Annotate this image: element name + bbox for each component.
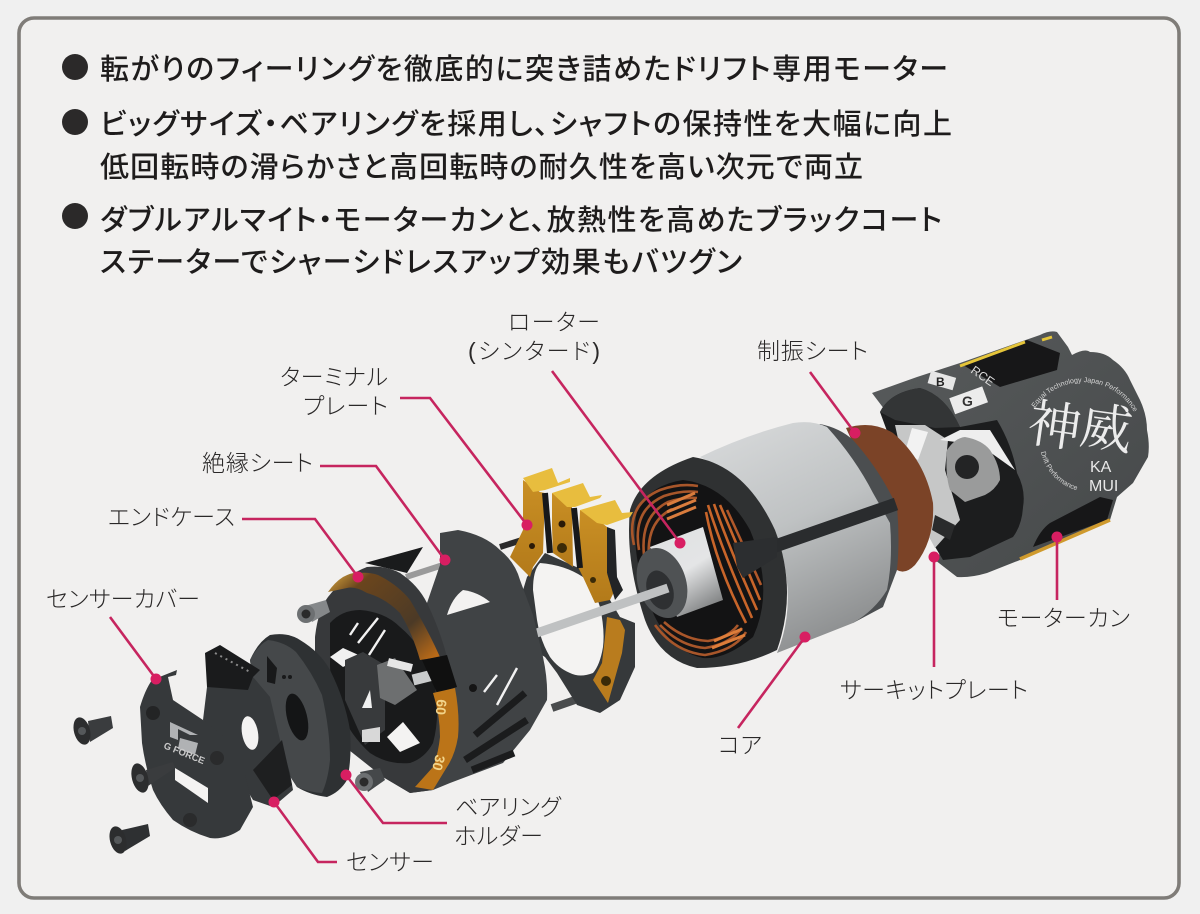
gold ring band upper xyxy=(328,573,440,660)
label: insulation sheet xyxy=(202,450,450,566)
plate gold bodies xyxy=(510,480,545,577)
label: sensor cover xyxy=(46,586,200,684)
case screw upper xyxy=(297,600,330,623)
G-FORCE logo xyxy=(162,722,206,767)
gold ring band lower xyxy=(415,688,459,790)
feature text 1: 転がりのフィーリングを徹底的に突き詰めたドリフト専用モーター xyxy=(100,53,948,86)
can hub and circuit plate xyxy=(895,425,1015,548)
ring scale number 30: 30 xyxy=(429,753,449,773)
copper windings xyxy=(632,485,761,655)
stator core xyxy=(628,422,898,668)
end case xyxy=(297,530,547,793)
ring scale number 60: 60 xyxy=(433,699,450,716)
label: rotor: (シンタード) xyxy=(468,338,600,364)
label: end case xyxy=(108,504,364,582)
plate tabs xyxy=(523,468,570,492)
can upper slot xyxy=(963,340,1060,387)
feature text 3 line 1: ダブルアルマイト・モーターカンと、放熱性を高めたブラックコート xyxy=(100,204,942,237)
label: rotor: ローター xyxy=(508,309,600,335)
feature text 2 line 2: 低回転時の滑らかさと高回転時の耐久性を高い次元で両立 xyxy=(100,151,863,184)
stator front ring xyxy=(629,457,787,668)
label: sensor cover: センサーカバー xyxy=(46,586,200,612)
can logo: Drift Performance xyxy=(1041,451,1078,490)
label: terminal plate: ターミナル xyxy=(280,364,388,390)
can interior xyxy=(880,388,1024,560)
can badge: RCE xyxy=(968,363,997,389)
sensor board xyxy=(203,645,293,807)
G-FORCE logo: G FORCE xyxy=(162,741,206,767)
leader lines and labels xyxy=(46,309,1130,875)
label: terminal plate xyxy=(280,364,532,530)
can badge: G xyxy=(962,393,973,409)
case body xyxy=(330,530,547,793)
label: damping sheet xyxy=(757,338,868,438)
label: bearing holder xyxy=(340,770,562,849)
feature text 2 line 1: ビッグサイズ・ベアリングを採用し、シャフトの保持性を大幅に向上 xyxy=(100,108,952,141)
plate hole xyxy=(533,563,604,676)
rear wedge and rods xyxy=(365,547,423,573)
rotor xyxy=(628,527,723,625)
rear rods xyxy=(500,540,522,547)
label: bearing holder: ホルダー xyxy=(454,823,543,849)
stator slot bar xyxy=(733,504,896,578)
feature list xyxy=(62,53,952,279)
case screw lower xyxy=(355,768,385,792)
can badge: B xyxy=(936,375,945,389)
shaft xyxy=(528,588,668,636)
label: insulation sheet: 絶縁シート xyxy=(202,450,313,476)
can logo: MUI xyxy=(1089,478,1118,495)
terminal plate xyxy=(500,468,635,713)
label: bearing holder: ベアリング xyxy=(455,794,562,820)
label: rotor xyxy=(468,309,686,548)
exploded motor diagram xyxy=(73,331,1149,854)
label: motor can: モーターカン xyxy=(997,605,1130,631)
case front face xyxy=(315,567,458,793)
label: sensor xyxy=(268,796,434,875)
motor can xyxy=(872,331,1149,578)
label: circuit plate xyxy=(840,552,1028,703)
screw bottom xyxy=(107,824,150,856)
bullet 3 xyxy=(62,203,88,229)
label: damping sheet: 制振シート xyxy=(757,338,868,364)
label: core: コア xyxy=(718,732,762,758)
label: core xyxy=(718,632,810,758)
sensor cover xyxy=(140,670,253,838)
plate dark ring xyxy=(520,553,635,713)
case opening detail xyxy=(330,618,527,770)
can badge xyxy=(928,363,997,414)
vibration damping sheet xyxy=(846,425,933,572)
bullet 1 xyxy=(62,54,88,80)
label: terminal plate: プレート xyxy=(303,393,388,419)
bullet 2 xyxy=(62,109,88,135)
label: circuit plate: サーキットプレート xyxy=(840,677,1028,703)
feature text 3 line 2: ステーターでシャーシドレスアップ効果もバツグン xyxy=(100,246,742,279)
can lower slot xyxy=(1033,497,1113,547)
can logo: Equal Technology Japan Performance xyxy=(1031,377,1136,412)
can logo: 威 xyxy=(1076,383,1138,465)
screw left top xyxy=(71,715,113,747)
bearing holder xyxy=(250,634,351,797)
label: motor can xyxy=(997,532,1130,631)
ring black notch xyxy=(422,655,457,693)
case opening xyxy=(330,610,437,763)
stator body xyxy=(700,422,891,653)
label: end case: エンドケース xyxy=(108,504,235,530)
can logo: 神 xyxy=(1025,381,1086,462)
screw middle xyxy=(128,761,175,795)
can logo xyxy=(1025,377,1138,495)
label: sensor: センサー xyxy=(346,849,434,875)
stator rear rim xyxy=(800,424,898,623)
can logo: KA xyxy=(1090,459,1112,476)
